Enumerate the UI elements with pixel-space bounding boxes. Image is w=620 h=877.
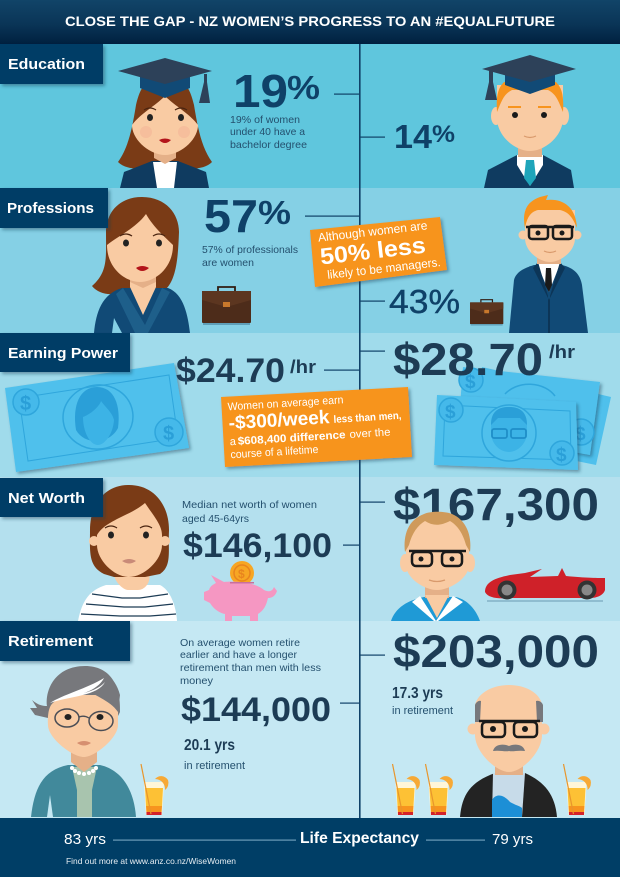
tab: education: Education bbox=[8, 56, 85, 73]
net worth note: aged 45-64yrs bbox=[182, 513, 249, 525]
net worth note: Median net worth of women bbox=[182, 499, 317, 511]
professions note: 57% of professionals bbox=[202, 244, 298, 256]
professions note: are women bbox=[202, 257, 254, 269]
stat men hourly: $28.70 bbox=[393, 334, 543, 385]
icon: woman banknote: $ bbox=[20, 393, 31, 415]
callout: lifetime difference: $608,400 difference bbox=[237, 429, 346, 448]
stat women hourly: /hr bbox=[290, 357, 316, 377]
woman professional bbox=[92, 197, 190, 333]
panel: retirement bbox=[30, 626, 599, 817]
older woman bbox=[30, 666, 136, 817]
connector right bbox=[360, 654, 385, 656]
education note: 19% of women bbox=[230, 114, 300, 126]
footer bbox=[0, 818, 620, 877]
stat 57%: 57 bbox=[204, 190, 258, 242]
tab: earning power: Earning Power bbox=[8, 345, 118, 362]
connector left bbox=[343, 544, 359, 546]
stat 19%: % bbox=[287, 69, 320, 106]
callout: managers: Although women are bbox=[317, 218, 428, 245]
icon: cocktail bbox=[141, 764, 168, 815]
icon: man banknotes: $ bbox=[575, 424, 586, 445]
tab: professions bbox=[0, 188, 108, 228]
women years in retirement bbox=[184, 737, 245, 772]
connector left bbox=[340, 702, 359, 704]
connector right bbox=[360, 136, 385, 138]
stat 57% bbox=[204, 190, 291, 242]
tab: professions: Professions bbox=[7, 200, 94, 217]
men life expectancy: 79 yrs bbox=[492, 831, 533, 848]
stat 19%: 19 bbox=[233, 65, 288, 117]
callout: lifetime difference: a bbox=[229, 436, 237, 448]
retirement note: earlier and have a longer bbox=[180, 649, 297, 661]
man with glasses bbox=[391, 512, 480, 621]
callout: lifetime difference: less than men, bbox=[333, 410, 402, 426]
callout: managers bbox=[310, 217, 447, 287]
source link: Find out more at www.anz.co.nz/WiseWomen bbox=[66, 856, 236, 866]
retirement note bbox=[180, 637, 321, 687]
men years in retirement: in retirement bbox=[392, 705, 453, 717]
connector left bbox=[334, 94, 359, 95]
stat 14%: 14 bbox=[394, 118, 433, 155]
icon: woman banknote bbox=[5, 363, 189, 472]
panel: net worth bbox=[78, 479, 605, 621]
education note: bachelor degree bbox=[230, 139, 307, 151]
callout: lifetime difference: Women on average earn bbox=[227, 394, 344, 413]
retirement note: retirement than men with less bbox=[180, 662, 321, 674]
icon: small briefcase bbox=[470, 300, 503, 326]
stat men net worth: $167,300 bbox=[393, 479, 599, 530]
icon: red car bbox=[485, 568, 605, 602]
icon: cocktail bbox=[426, 764, 453, 815]
stat 14%: % bbox=[432, 121, 455, 148]
icon: cocktail bbox=[564, 764, 591, 815]
women years in retirement: 20.1 yrs bbox=[184, 737, 235, 754]
stat men hourly: /hr bbox=[549, 342, 575, 362]
icon: piggy bank bbox=[204, 561, 277, 621]
title: CLOSE THE GAP - NZ WOMEN’S PROGRESS TO AN #EQUALFUTURE bbox=[65, 13, 555, 29]
men years in retirement bbox=[392, 685, 453, 717]
older man bbox=[460, 685, 557, 817]
connector left bbox=[324, 370, 359, 371]
tab: net worth: Net Worth bbox=[8, 490, 85, 507]
callout: lifetime difference: over the bbox=[349, 426, 391, 441]
icon: man banknotes: $ bbox=[556, 445, 567, 466]
tab: earning power bbox=[0, 333, 130, 372]
connector right bbox=[360, 300, 385, 302]
panel: earning power bbox=[5, 334, 611, 472]
icon: man banknotes bbox=[434, 367, 611, 470]
men years in retirement: 17.3 yrs bbox=[392, 685, 443, 702]
man graduate bbox=[482, 55, 576, 188]
connector right bbox=[360, 502, 385, 503]
stat women retirement savings: $144,000 bbox=[181, 691, 331, 729]
women years in retirement: in retirement bbox=[184, 760, 245, 772]
panel: education bbox=[118, 55, 576, 188]
stat 43%: 43% bbox=[389, 283, 460, 320]
woman striped top bbox=[78, 485, 177, 621]
stat men retirement savings: $203,000 bbox=[393, 626, 599, 677]
center divider bbox=[359, 44, 361, 818]
life expectancy label: Life Expectancy bbox=[300, 830, 419, 847]
icon: man banknotes: $ bbox=[465, 372, 476, 393]
callout: lifetime difference: -$300/week bbox=[228, 407, 331, 434]
icon: briefcase bbox=[202, 287, 251, 325]
icon: man banknotes: $ bbox=[445, 402, 456, 423]
tab: retirement: Retirement bbox=[8, 633, 93, 650]
icon: piggy bank: $ bbox=[238, 567, 245, 581]
stat 14% bbox=[394, 118, 455, 155]
icon: cocktail bbox=[392, 764, 420, 815]
retirement note: On average women retire bbox=[180, 637, 300, 649]
stat women hourly: $24.70 bbox=[176, 352, 285, 390]
education note bbox=[230, 114, 307, 151]
education note: under 40 have a bbox=[230, 126, 305, 138]
professions note bbox=[202, 244, 298, 269]
stat women net worth: $146,100 bbox=[183, 527, 332, 565]
retirement note: money bbox=[180, 675, 214, 687]
women life expectancy: 83 yrs bbox=[64, 831, 106, 848]
man professional bbox=[509, 195, 588, 333]
connector left bbox=[305, 216, 359, 217]
stat 57%: % bbox=[258, 194, 291, 231]
callout: managers: likely to be managers. bbox=[326, 255, 441, 282]
callout: managers: 50% less bbox=[319, 232, 427, 269]
tab: retirement bbox=[0, 621, 130, 661]
callout: lifetime difference: course of a lifetime bbox=[230, 444, 319, 461]
header bar bbox=[0, 0, 620, 44]
icon: woman banknote: $ bbox=[163, 423, 174, 445]
tab: net worth bbox=[0, 478, 103, 517]
connector right bbox=[360, 350, 385, 352]
panel: professions bbox=[92, 190, 588, 333]
callout: lifetime difference bbox=[221, 387, 412, 467]
stat 19% bbox=[233, 65, 320, 117]
net worth note bbox=[182, 499, 317, 525]
woman graduate bbox=[118, 58, 212, 188]
tab: education bbox=[0, 44, 103, 84]
